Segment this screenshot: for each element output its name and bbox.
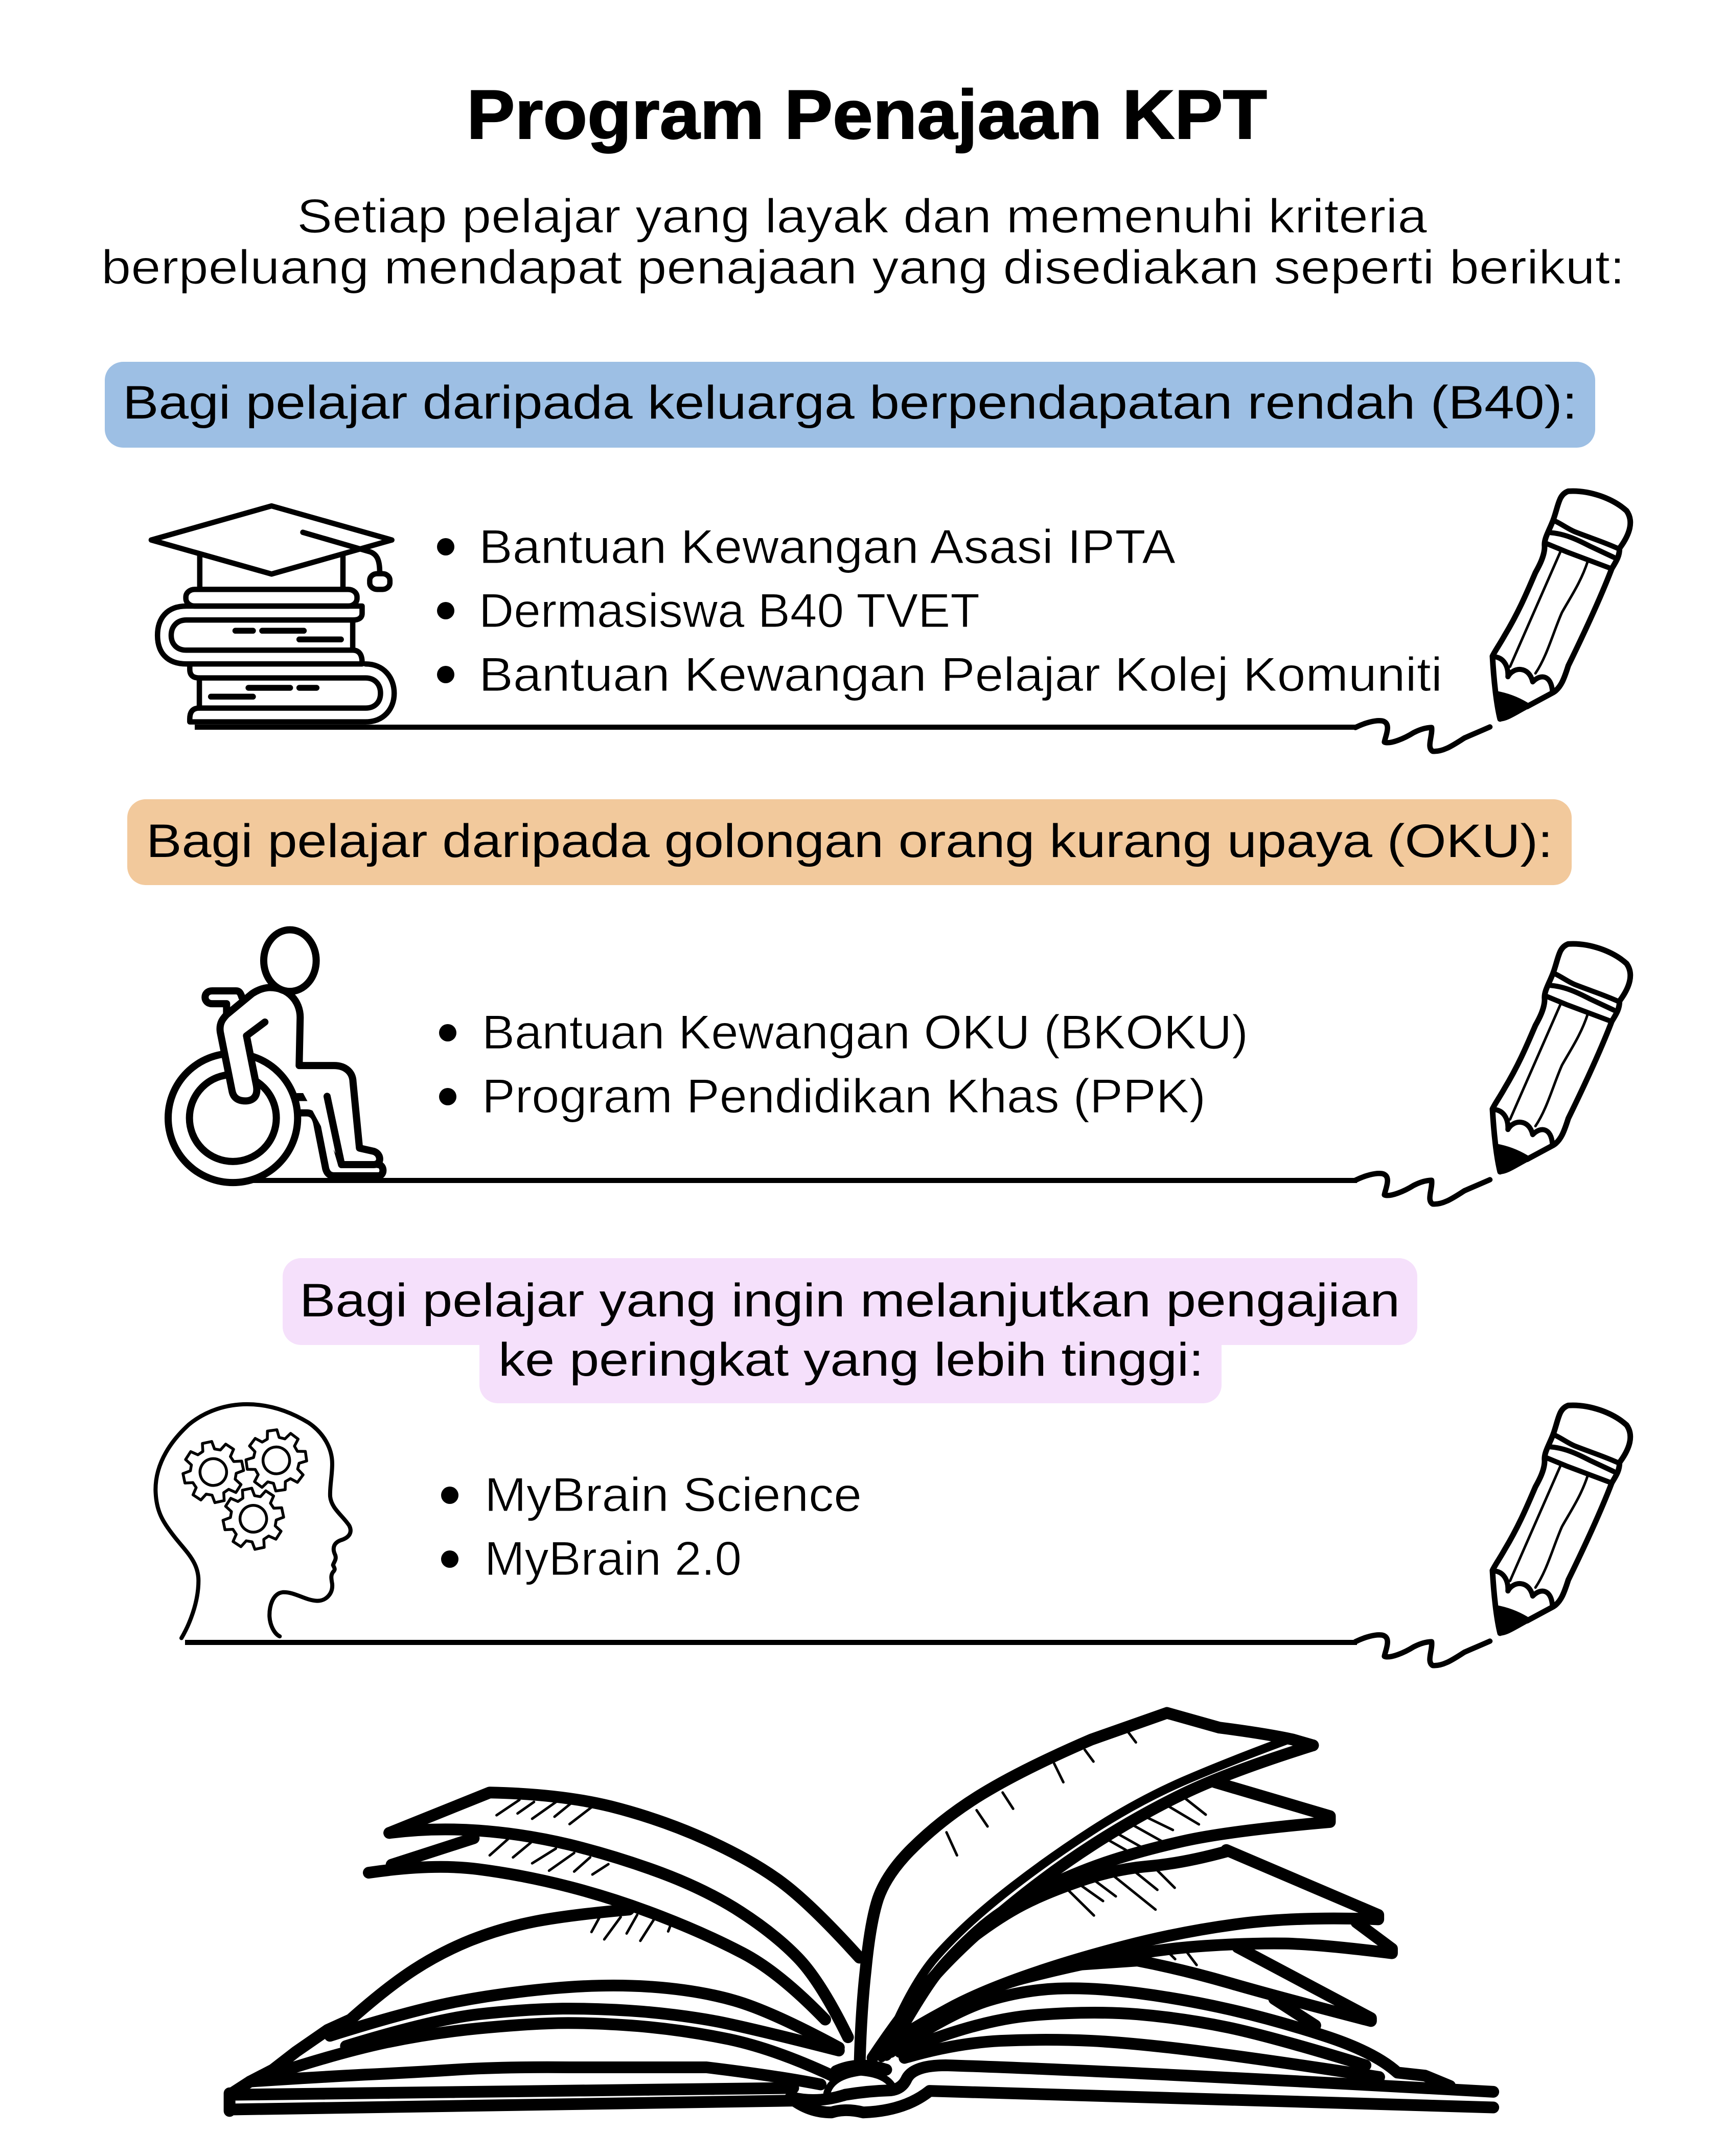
heading banner: further study: [283, 1258, 1417, 1403]
book left pages: [229, 1793, 859, 2111]
book right pages and spine: [790, 1713, 1493, 2113]
bullet list: OKU: Program Pendidikan Khas (PPK): [482, 1069, 1206, 1123]
icon: wheelchair user: [168, 930, 383, 1183]
icon: head with gears: [155, 1404, 351, 1638]
heading banner: B40: [105, 362, 1595, 448]
bullet list: OKU: Bantuan Kewangan OKU (BKOKU): [482, 1005, 1248, 1059]
heading banner: B40: Bagi pelajar daripada keluarga berpendapatan rendah (B40):: [123, 377, 1577, 429]
writing line: [195, 725, 1357, 730]
intro text: berpeluang mendapat penajaan yang disediakan seperti berikut:: [101, 240, 1625, 294]
heading banner: OKU: [127, 799, 1572, 885]
bullet list: B40: Bantuan Kewangan Asasi IPTA: [479, 520, 1176, 573]
bullet list: OKU: [439, 1005, 1248, 1123]
bullet list: further study: [441, 1468, 862, 1585]
illustration: open book: [229, 1713, 1493, 2113]
title: Program Penajaan KPT: [467, 76, 1267, 153]
icon: graduation cap on books: [151, 506, 394, 722]
bullet list: B40: [437, 520, 1442, 701]
heading banner: further study: ke peringkat yang lebih tinggi:: [498, 1334, 1204, 1386]
panel: further study: [155, 1258, 1630, 1665]
icon: pencil: [1355, 1405, 1630, 1665]
heading banner: further study: Bagi pelajar yang ingin melanjutkan pengajian: [300, 1274, 1400, 1327]
bullet list: further study: MyBrain 2.0: [485, 1532, 742, 1585]
icon: pencil: [1355, 944, 1630, 1204]
bullet list: further study: MyBrain Science: [485, 1468, 862, 1521]
bullet list: B40: Bantuan Kewangan Pelajar Kolej Komuniti: [479, 647, 1442, 701]
heading banner: OKU: Bagi pelajar daripada golongan orang kurang upaya (OKU):: [146, 815, 1553, 867]
panel: B40: [105, 362, 1630, 751]
intro text: Setiap pelajar yang layak dan memenuhi kriteria: [297, 189, 1428, 243]
intro text: [101, 189, 1625, 294]
panel: OKU: [127, 799, 1630, 1204]
icon: pencil: [1355, 491, 1630, 751]
writing line: [185, 1640, 1357, 1645]
bullet list: B40: Dermasiswa B40 TVET: [479, 584, 980, 637]
writing line: [250, 1178, 1357, 1183]
